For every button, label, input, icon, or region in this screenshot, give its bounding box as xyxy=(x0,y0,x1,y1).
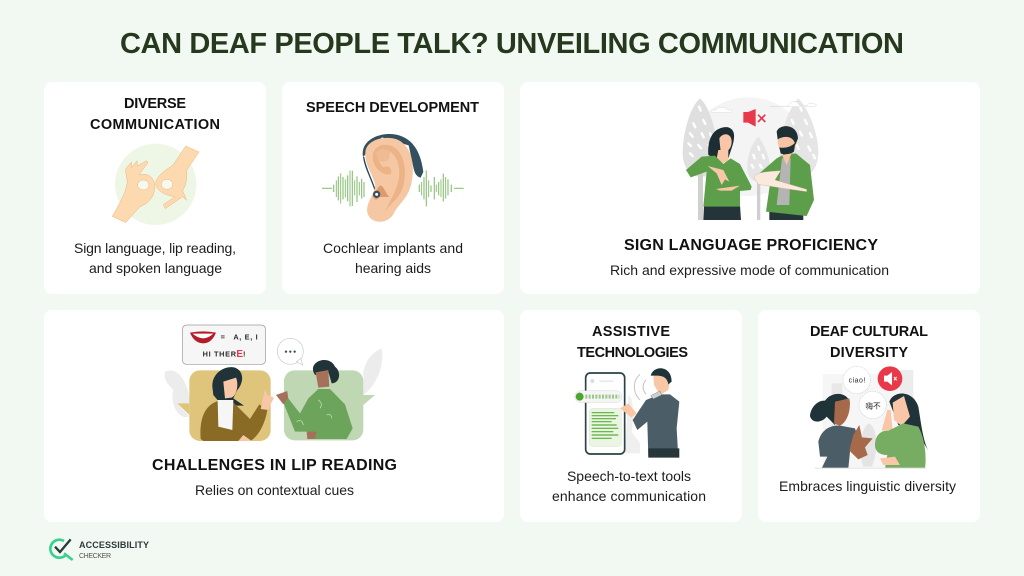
panel: challenges in lip reading xyxy=(44,310,504,522)
description: Relies on contextual cues xyxy=(195,482,354,498)
icon: speech bubble chinese: 嗨不 xyxy=(865,400,881,410)
heading: diverse communication xyxy=(90,96,220,133)
man xyxy=(754,126,814,220)
heading: deaf cultural diversity: DEAF CULTURAL xyxy=(810,324,928,340)
heading: assistive technologies: TECHNOLOGIES xyxy=(577,345,688,361)
title: CAN DEAF PEOPLE TALK? UNVEILING COMMUNICATION xyxy=(120,28,904,60)
heading: challenges in lip reading: CHALLENGES IN LIP READING xyxy=(152,457,397,474)
description: hearing aids xyxy=(355,260,431,276)
description: Embraces linguistic diversity xyxy=(779,478,956,494)
icon: magnifier check xyxy=(50,539,73,560)
speech bubble: lips: = xyxy=(221,333,225,342)
speech bubble: lips: A, E, I xyxy=(233,333,258,342)
speech bubble: lips: E xyxy=(236,349,243,360)
description: Rich and expressive mode of communication xyxy=(610,262,889,278)
man xyxy=(620,368,679,458)
logo: accessibility checker: CHECKER xyxy=(79,553,111,560)
speech bubble: lips: ! xyxy=(243,349,245,358)
description: Sign language, lip reading, xyxy=(74,240,236,256)
description xyxy=(552,468,706,504)
logo: accessibility checker xyxy=(50,539,149,560)
woman xyxy=(686,127,752,220)
speech bubble: lips xyxy=(182,325,266,364)
panel: speech development xyxy=(282,82,504,294)
description xyxy=(323,240,463,276)
woman left xyxy=(810,394,873,468)
woman right xyxy=(875,393,928,468)
heading: assistive technologies xyxy=(577,324,688,361)
illustration: lip reading conversation xyxy=(165,325,382,441)
logo: accessibility checker: ACCESSIBILITY xyxy=(79,540,149,550)
heading: sign language proficiency: SIGN LANGUAGE PROFICIENCY xyxy=(624,237,878,254)
speech bubble: dots xyxy=(277,338,303,365)
description: Speech-to-text tools xyxy=(567,468,691,484)
panel: sign language proficiency xyxy=(520,82,980,294)
panel: diverse communication xyxy=(44,82,266,294)
description: and spoken language xyxy=(89,260,222,276)
heading: diverse communication: DIVERSE xyxy=(124,96,186,112)
illustration: two people signing xyxy=(683,97,818,220)
description: Cochlear implants and xyxy=(323,240,463,256)
panel: assistive technologies xyxy=(520,310,742,522)
panel: deaf cultural diversity xyxy=(758,310,980,522)
description xyxy=(74,240,236,276)
heading: assistive technologies: ASSISTIVE xyxy=(592,324,670,340)
icon: speech bubble ciao: ciao! xyxy=(849,378,865,385)
icon: signing hands xyxy=(112,144,199,225)
icon: ear with hearing aid xyxy=(322,134,464,222)
sound waves xyxy=(322,170,464,206)
illustration: speech to text phone xyxy=(575,368,679,458)
heading: deaf cultural diversity: DIVERSITY xyxy=(830,345,908,361)
heading: deaf cultural diversity xyxy=(810,324,928,361)
speech bubble: lips: HI THER xyxy=(203,349,237,358)
icon: muted speaker xyxy=(743,109,765,127)
description: enhance communication xyxy=(552,488,706,504)
heading: speech development: SPEECH DEVELOPMENT xyxy=(306,100,479,116)
woman xyxy=(200,367,274,441)
icon: muted speaker badge xyxy=(878,366,902,391)
heading: diverse communication: COMMUNICATION xyxy=(90,117,220,133)
man xyxy=(276,360,353,439)
illustration: two people talking xyxy=(810,366,928,469)
